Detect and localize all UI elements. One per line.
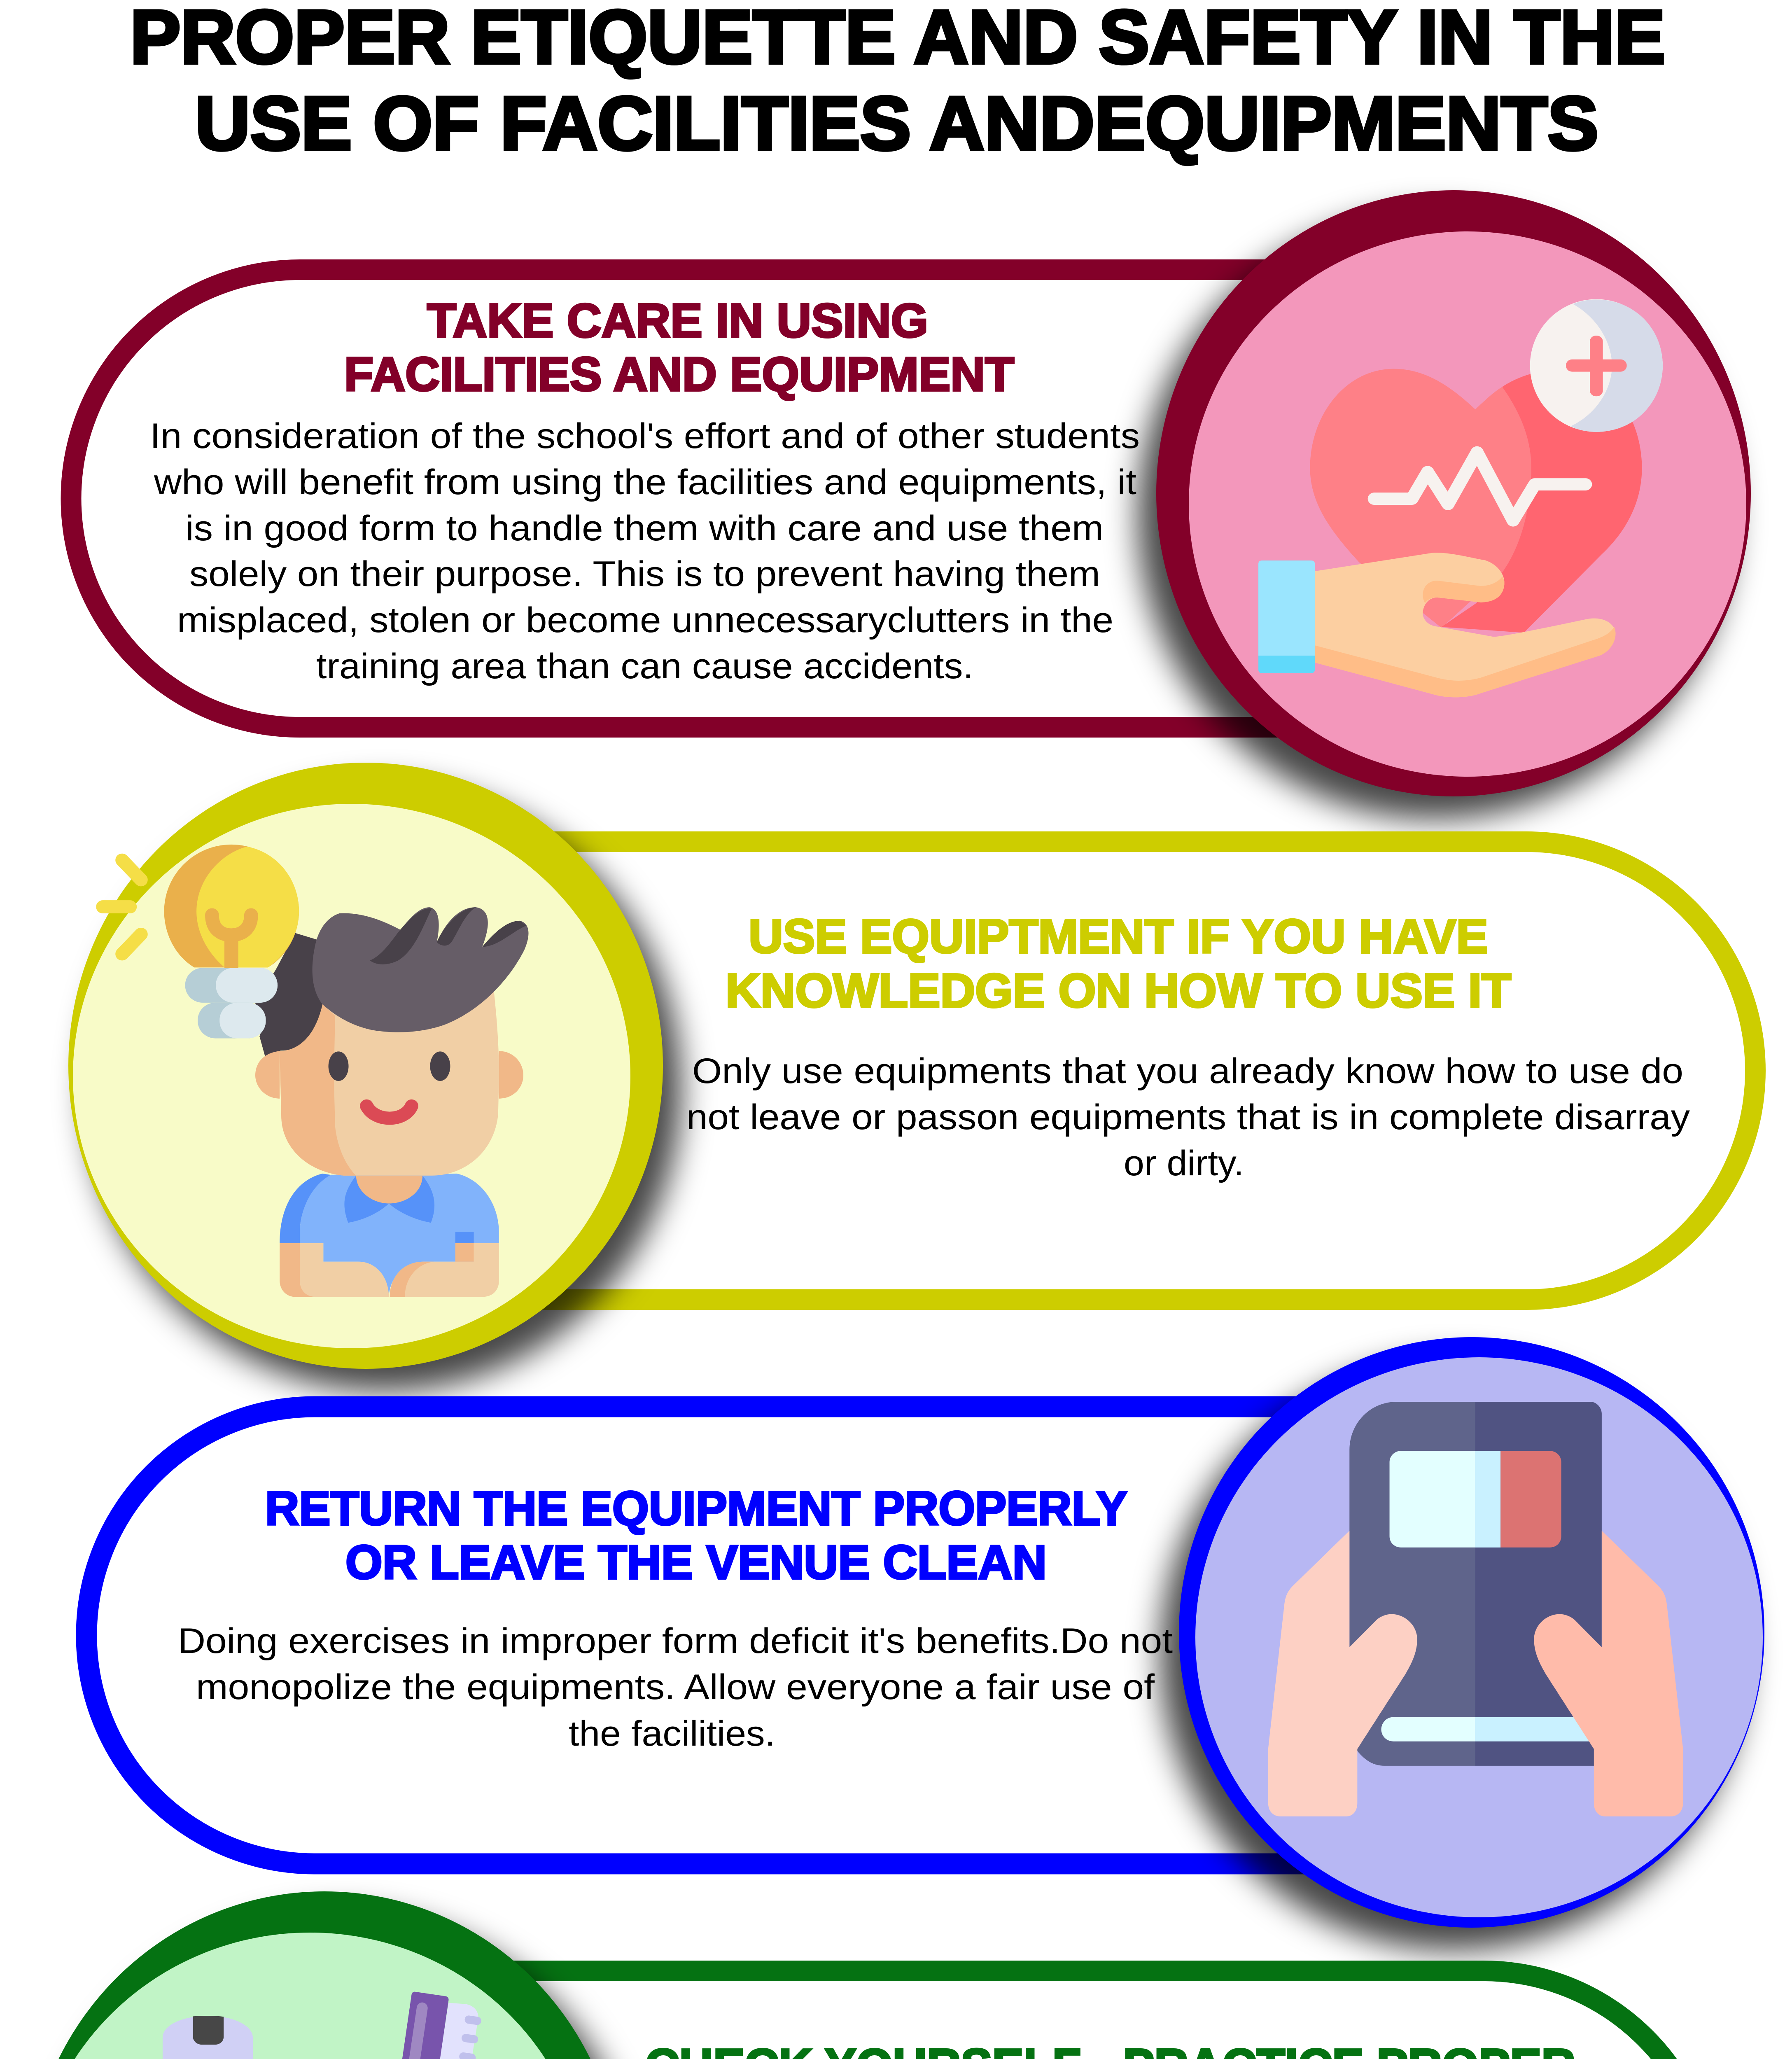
heading: knowledge: KNOWLEDGE ON HOW TO USE IT — [726, 964, 1511, 1017]
panel: take care in using facilities — [71, 190, 1751, 819]
body text: take care: solely on their purpose. This is to prevent having them — [189, 554, 1100, 594]
heading: take care: TAKE CARE IN USING — [427, 294, 928, 348]
heading: return — [265, 1482, 1127, 1589]
circle shadow: take care — [1138, 213, 1732, 819]
pill outline: hygiene — [329, 1971, 1713, 2059]
body text: return: Doing exercises in improper form deficit it's benefits.Do not — [178, 1621, 1173, 1661]
circle badge: knowledge — [68, 763, 663, 1369]
panel: use equipment if you have knowledge — [68, 763, 1755, 1391]
heading: knowledge — [726, 909, 1511, 1017]
circle badge: return — [1179, 1337, 1764, 1928]
icon: hands holding book — [1268, 1402, 1683, 1816]
body text: take care — [150, 416, 1140, 686]
body text: return — [178, 1621, 1173, 1753]
heading: take care — [344, 294, 1014, 401]
body text: return: the facilities. — [569, 1714, 775, 1753]
heading: take care: FACILITIES AND EQUIPMENT — [344, 348, 1014, 401]
body text: knowledge: or dirty. — [1124, 1144, 1244, 1183]
body text: knowledge — [686, 1051, 1690, 1183]
body text: take care: training area than can cause accidents. — [316, 647, 973, 686]
pill outline: return — [86, 1407, 1482, 1864]
pill outline: knowledge — [371, 842, 1755, 1300]
heading: return: OR LEAVE THE VENUE CLEAN — [345, 1535, 1047, 1589]
circle shadow: return — [1160, 1360, 1746, 1950]
circle shadow: knowledge — [87, 785, 681, 1391]
icon: toiletries — [113, 1992, 478, 2059]
title — [130, 0, 1665, 166]
body text: take care: is in good form to handle them with care and use them — [185, 509, 1104, 548]
circle badge: take care — [1156, 190, 1751, 796]
heading: knowledge: USE EQUIPTMENT IF YOU HAVE — [749, 909, 1488, 963]
circle badge: hygiene — [27, 1891, 622, 2059]
body text: knowledge: not leave or passon equipments that is in complete disarray — [686, 1097, 1690, 1137]
body text: take care: In consideration of the school's effort and of other students — [150, 416, 1140, 456]
circle shadow: hygiene — [46, 1914, 640, 2059]
heading: return: RETURN THE EQUIPMENT PROPERLY — [265, 1482, 1127, 1535]
icon: heart in hand — [1258, 299, 1663, 697]
body text: take care: misplaced, stolen or become unnecessaryclutters in the — [177, 600, 1113, 640]
icon: boy with light bulb — [103, 845, 528, 1297]
body text: return: monopolize the equipments. Allow everyone a fair use of — [196, 1667, 1155, 1707]
pill outline: take care — [71, 270, 1441, 727]
body text: take care: who will benefit from using the facilities and equipments, it — [154, 462, 1136, 502]
panel: check yourself hygiene — [27, 1891, 1713, 2059]
panel: return the equipment properly — [86, 1337, 1764, 1950]
title: USE OF FACILITIES ANDEQUIPMENTS — [195, 81, 1598, 166]
body text: knowledge: Only use equipments that you already know how to use do — [692, 1051, 1683, 1091]
